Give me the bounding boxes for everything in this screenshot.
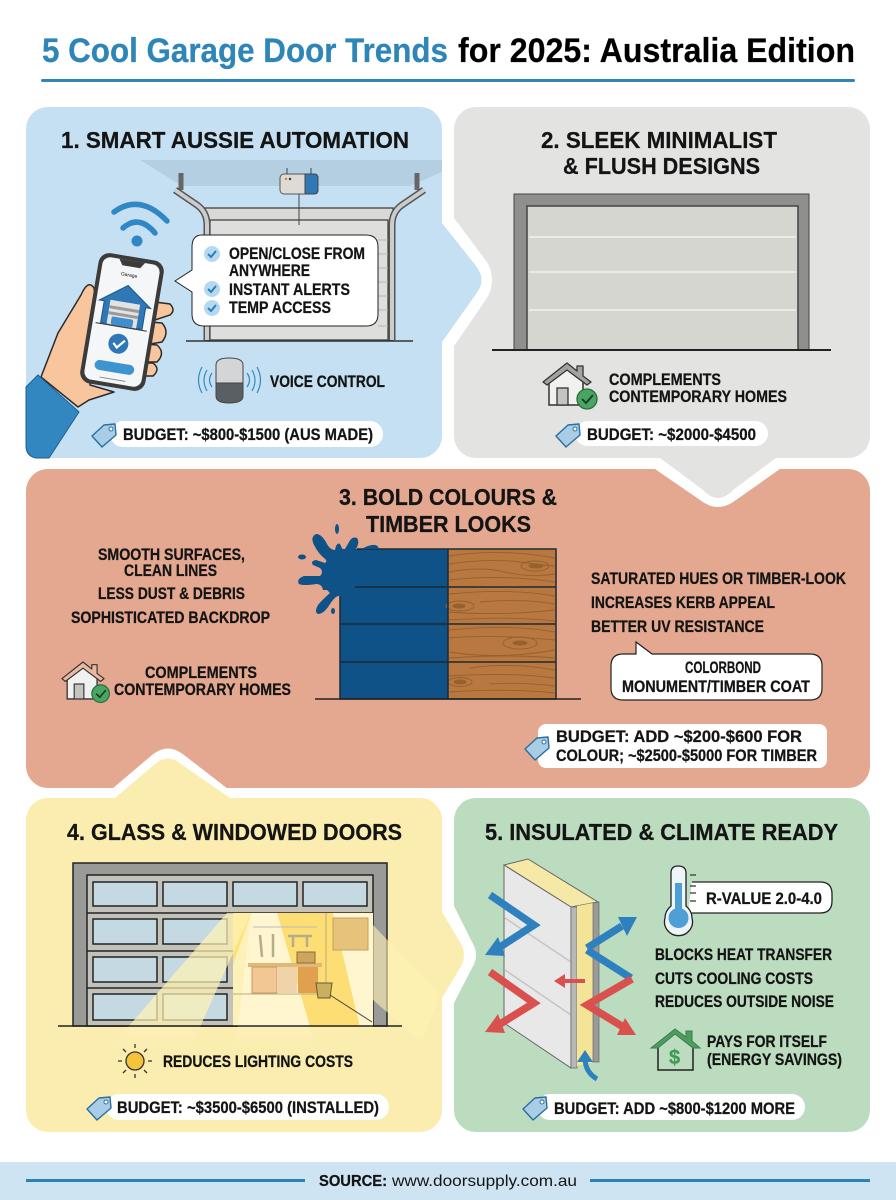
heading: panel 4: 4. GLASS & WINDOWED DOORS [67,819,402,845]
text: right benefits, panel 3: INCREASES KERB APPEAL [591,594,775,612]
title: for 2025: Australia Edition [458,32,855,70]
heading: panel 1: 1. SMART AUSSIE AUTOMATION [61,127,409,153]
text: pays for itself: (ENERGY SAVINGS) [707,1051,842,1069]
text: complements, panel 3: CONTEMPORARY HOMES [114,681,291,699]
budget: panel 5 [523,1094,805,1120]
icon: house check, panel 2 [543,363,597,409]
garage door: colour and timber [298,524,581,699]
panel: bold colours [26,469,870,788]
text: lighting costs: REDUCES LIGHTING COSTS [163,1053,353,1071]
callout: smart features: OPEN/CLOSE FROM [229,245,365,263]
budget: panel 3 [525,724,827,768]
budget: panel 1 [92,421,383,447]
callout: colorbond: COLORBOND [685,659,761,677]
budget: panel 5: BUDGET: ADD ~$800-$1200 MORE [554,1100,795,1118]
text: left benefits, panel 3: SMOOTH SURFACES, [98,546,245,564]
text: complements, panel 2: COMPLEMENTS [609,371,721,389]
garage door: flush [492,194,831,350]
arrow: panel 1 to panel 2 [442,218,492,346]
text: insulation benefits: BLOCKS HEAT TRANSFER [655,946,832,964]
budget: panel 3: COLOUR; ~$2500-$5000 FOR TIMBER [556,747,817,765]
budget: panel 4 [87,1094,389,1120]
heading: panel 5: 5. INSULATED & CLIMATE READY [485,819,838,845]
garage interior [233,913,373,1027]
budget: panel 2: BUDGET: ~$2000-$4500 [587,426,756,444]
footer: source [0,1162,896,1200]
panel: insulated [454,798,870,1132]
phone [79,251,165,393]
budget: panel 3: BUDGET: ADD ~$200-$600 FOR [556,728,802,746]
text: pays for itself: PAYS FOR ITSELF [707,1033,827,1051]
text: left benefits, panel 3: CLEAN LINES [124,562,217,580]
phone: Garage [120,271,138,280]
icon: hand holding phone [26,251,173,458]
callout: smart features: INSTANT ALERTS [229,281,350,299]
garage door illustration: panel 1 [140,160,442,341]
text: right benefits, panel 3: SATURATED HUES OR TIMBER-LOOK [591,570,846,588]
garage door: glass [58,863,440,1050]
arrow: panel 3 to panel 4 [112,748,230,798]
text: insulation benefits: REDUCES OUTSIDE NOISE [655,993,834,1011]
icon: house with dollar: $ [669,1047,680,1069]
icon: garage opener [280,168,318,225]
text: left benefits, panel 3: LESS DUST & DEBRIS [98,585,245,603]
footer: source: SOURCE: [319,1173,387,1190]
heading: panel 3: TIMBER LOOKS [366,511,531,537]
icon: thermometer with r-value: R-VALUE 2.0-4.0 [706,890,822,908]
panel: glass doors [26,798,442,1132]
text: left benefits, panel 3: SOPHISTICATED BACKDROP [71,609,270,627]
callout: colorbond [611,642,822,700]
icon: paint splash [298,524,379,614]
heading: panel 2 second line: & FLUSH DESIGNS [563,153,760,179]
title [41,32,855,82]
budget: panel 4: BUDGET: ~$3500-$6500 (INSTALLED) [117,1099,379,1117]
text: complements, panel 3: COMPLEMENTS [145,664,257,682]
panel: sleek minimalist [454,107,870,458]
budget: panel 1: BUDGET: ~$800-$1500 (AUS MADE) [123,426,373,444]
text: right benefits, panel 3 [591,570,846,636]
text: insulation benefits: CUTS COOLING COSTS [655,970,813,988]
icon: smart speaker [198,358,260,403]
icon: wifi [114,204,167,246]
budget: panel 2 [556,421,768,447]
arrow: panel 4 to panel 5 [442,906,476,1003]
blue arrows [490,895,631,1079]
title: 5 Cool Garage Door Trends [42,32,448,70]
callout: smart features: TEMP ACCESS [229,299,331,317]
callout: colorbond: MONUMENT/TIMBER COAT [622,678,810,696]
text: left benefits, panel 3 [71,546,270,627]
text: right benefits, panel 3: BETTER UV RESISTANCE [591,618,764,636]
text: complements, panel 2 [609,371,787,406]
text: voice control: VOICE CONTROL [270,373,385,391]
text: pays for itself [707,1033,842,1069]
icon: sun [118,1044,152,1078]
heading: panel 3 [339,484,557,537]
footer: source: www.doorsupply.com.au [391,1173,577,1190]
red arrows [490,972,632,1028]
callout: smart features: ANYWHERE [229,262,310,280]
light beams [105,913,440,1050]
arrow: panel 2 to panel 3 [655,458,780,507]
text: complements, panel 2: CONTEMPORARY HOMES [609,388,787,406]
heading: panel 3: 3. BOLD COLOURS & [339,484,557,510]
insulated panel illustration [485,859,637,1079]
callout: smart features [175,235,378,326]
icon: house check, panel 3 [62,662,109,702]
text: insulation benefits [655,946,834,1011]
icon: thermometer with r-value [664,866,832,936]
text: complements, panel 3 [114,664,291,699]
icon: house with dollar [651,1029,700,1070]
heading: panel 2: 2. SLEEK MINIMALIST [541,127,777,153]
panel: smart aussie automation [26,107,442,458]
